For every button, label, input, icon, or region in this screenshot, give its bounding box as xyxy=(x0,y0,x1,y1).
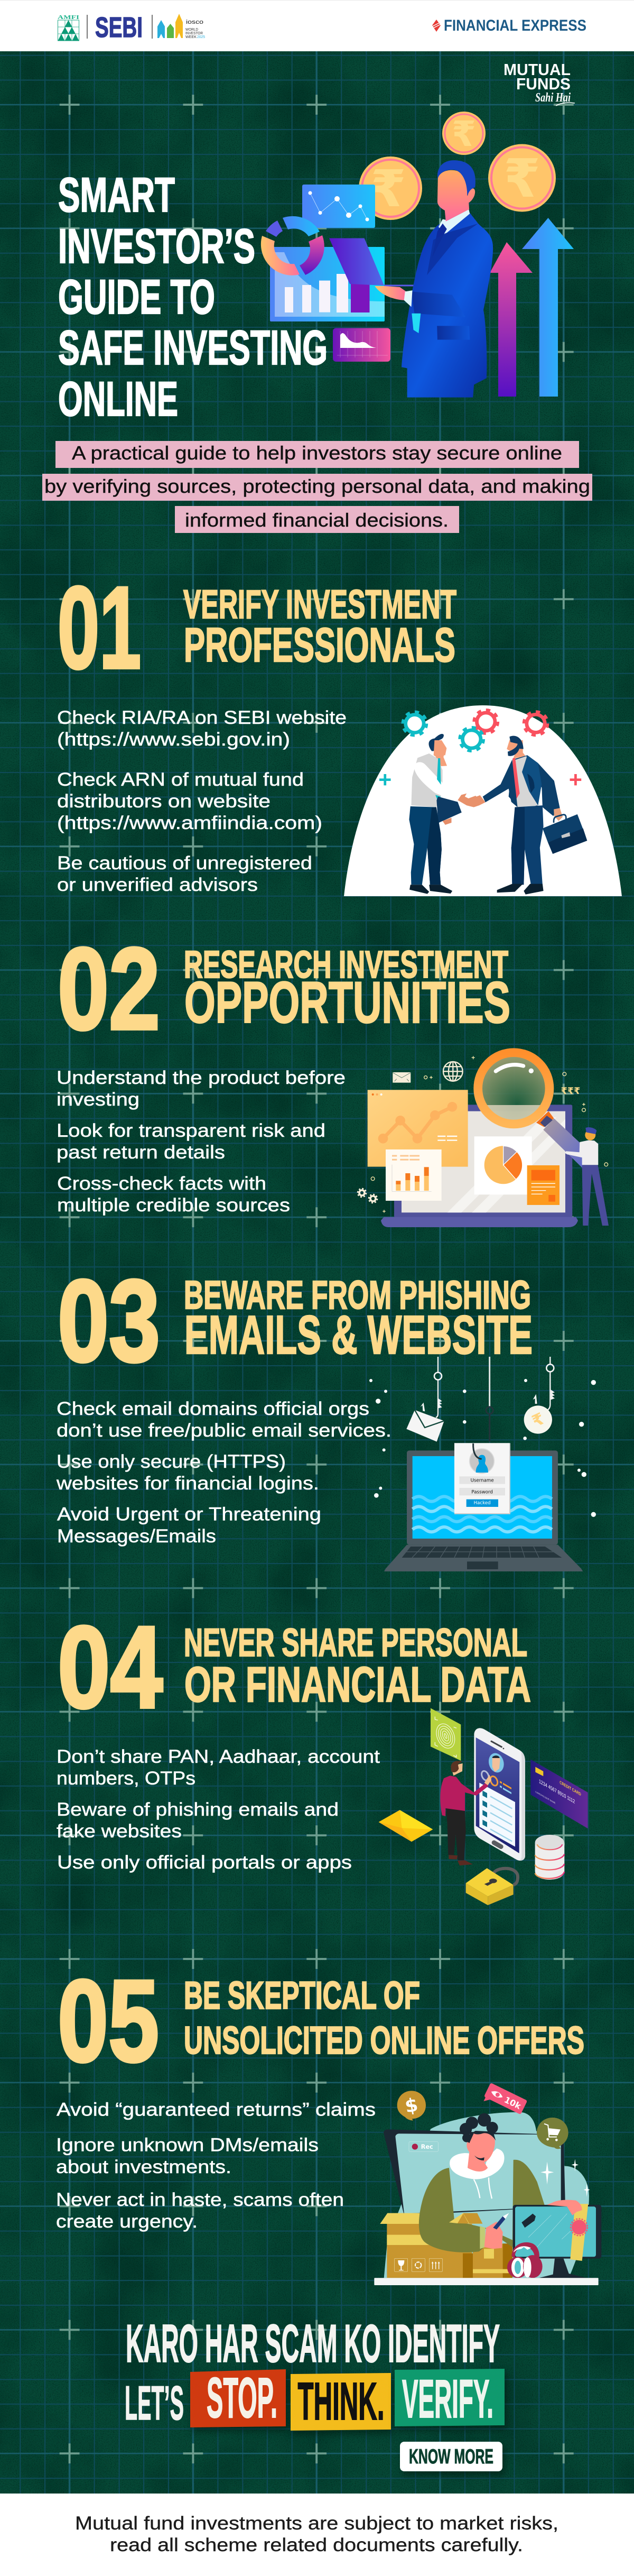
hero illustration: businessman with charts, coins and arrows xyxy=(261,112,574,398)
backdrop blob xyxy=(384,2112,589,2278)
icon: rupee coins: ₹ xyxy=(371,159,406,218)
chart: pie chart card xyxy=(474,1136,532,1194)
section 05 heading xyxy=(184,1974,584,2062)
logo: IOSCO World Investor Week 2025: iosco xyxy=(186,19,203,25)
section 02 text: multiple credible sources xyxy=(57,1195,290,1216)
section 03 illustration: phishing hooks and laptop xyxy=(369,1357,596,1571)
chart: orange line chart panel xyxy=(368,1090,468,1167)
section 04 text: Don’t share PAN, Aadhaar, account xyxy=(57,1746,380,1767)
section 03 text: Check email domains official orgs xyxy=(57,1399,369,1419)
icon: rupee coins xyxy=(359,112,556,220)
chart: dashboard bar chart xyxy=(270,247,385,321)
logo: Mutual Funds Sahi Hai: Sahi Hai xyxy=(535,91,571,105)
icon: rupee coins: ₹ xyxy=(504,148,540,209)
icon: growth arrows xyxy=(490,218,574,397)
button: know more: KNOW MORE xyxy=(409,2445,493,2468)
callout: VERIFY: VERIFY. xyxy=(402,2369,493,2429)
icon: hook with rupee coin xyxy=(524,1357,555,1434)
icon: sparkles xyxy=(540,2159,590,2197)
logo: IOSCO World Investor Week 2025: WEEK xyxy=(185,35,197,39)
figure: right man xyxy=(483,736,563,895)
logo: Mutual Funds Sahi Hai: MUTUAL xyxy=(504,60,571,79)
figure: left man xyxy=(409,734,463,894)
icon: view count bubble: 10k xyxy=(502,2095,523,2111)
subtitle block xyxy=(42,441,592,533)
section 04 text: Beware of phishing emails and xyxy=(57,1799,339,1820)
title: SMART xyxy=(58,168,175,222)
icon: cardboard boxes xyxy=(380,2213,512,2278)
footer disclaimer xyxy=(0,2494,634,2576)
section 05 text xyxy=(56,2099,376,2232)
header bar with partner logos xyxy=(0,0,634,51)
figure: businessman xyxy=(375,160,493,398)
icon: credit card: CREDIT CARD xyxy=(560,1779,581,1797)
icon: hook with rupee coin: ₹ xyxy=(529,1410,547,1431)
icon: credit card xyxy=(530,1760,588,1828)
section 05 text: create urgency. xyxy=(56,2211,198,2232)
section 04 text: Use only official portals or apps xyxy=(57,1852,352,1873)
figure: small person holding magnifier xyxy=(543,1118,609,1226)
chart: mini area chart card xyxy=(333,328,390,362)
figure: person in hoodie xyxy=(419,2113,548,2259)
subtitle block: A practical guide to help investors stay secure online xyxy=(72,442,562,464)
section 02 text: investing xyxy=(57,1089,139,1110)
logo: Financial Express: FINANCIAL EXPRESS xyxy=(444,17,586,34)
small decoration dots xyxy=(369,1379,596,1517)
section 03 text: Use only secure (HTTPS) xyxy=(57,1451,286,1472)
section 01 text: Be cautious of unregistered xyxy=(57,853,312,873)
section 01 heading xyxy=(183,582,456,672)
section 04 text: fake websites xyxy=(57,1821,182,1842)
icon: handshake xyxy=(458,794,486,807)
logo: IOSCO World Investor Week 2025: 2025 xyxy=(197,35,205,39)
section 01 text xyxy=(57,707,347,895)
icon: headphones xyxy=(507,2242,543,2278)
logo: IOSCO World Investor Week 2025 xyxy=(157,14,205,39)
title xyxy=(58,168,328,426)
panel: login card: Username xyxy=(471,1478,494,1484)
section 04 text xyxy=(57,1746,380,1873)
icon: speech bubble dollar xyxy=(397,2091,426,2121)
section 05 text: Ignore unknown DMs/emails xyxy=(56,2135,319,2155)
icon: small gears xyxy=(358,1189,377,1203)
icon: large monitor xyxy=(384,2129,565,2215)
subtitle block: by verifying sources, protecting personal data, and making xyxy=(44,475,590,497)
closing slogan xyxy=(125,2314,505,2431)
callout: THINK xyxy=(291,2372,391,2431)
small decorations xyxy=(371,1056,608,1213)
section 03 text: don’t use free/public email services. xyxy=(57,1420,391,1441)
logo: AMFI xyxy=(58,14,79,41)
icon: credit card: 1234 4567 8910 1112 xyxy=(539,1779,575,1805)
logo: Mutual Funds Sahi Hai xyxy=(504,60,575,106)
logo: Mutual Funds Sahi Hai: FUNDS xyxy=(516,75,571,93)
section 01 text: (https://www.sebi.gov.in) xyxy=(57,729,290,750)
section 02 text: past return details xyxy=(57,1142,225,1163)
section 05 text: Never act in haste, scams often xyxy=(56,2189,344,2210)
icon: hook with envelope xyxy=(406,1357,444,1442)
shelf xyxy=(374,2278,599,2285)
icon: yellow envelope xyxy=(379,1810,433,1842)
section 03 number: 03 xyxy=(58,1256,160,1386)
title: ONLINE xyxy=(58,372,178,426)
icon: database cylinder xyxy=(535,1835,564,1880)
title: SAFE INVESTING xyxy=(58,321,328,375)
icon: globe xyxy=(443,1062,463,1081)
button: know more xyxy=(400,2442,502,2471)
section 04 illustration: phone with identity data xyxy=(379,1708,588,1905)
section 03 text: Messages/Emails xyxy=(57,1526,216,1547)
section 02 heading xyxy=(184,944,510,1035)
icon: credit card: CARDHOLDER NAME xyxy=(535,1790,555,1805)
section 02 text: Look for transparent risk and xyxy=(57,1120,325,1141)
callout: VERIFY xyxy=(395,2369,505,2429)
figure: person touching phone xyxy=(440,1761,491,1865)
icon: padlock xyxy=(466,1868,518,1905)
section 01 heading: PROFESSIONALS xyxy=(184,619,455,672)
icon: briefcase xyxy=(543,814,587,854)
subtitle block: informed financial decisions. xyxy=(185,509,449,531)
section 03 text: Avoid Urgent or Threatening xyxy=(57,1504,321,1525)
icon: gears xyxy=(403,710,547,751)
section 03 text xyxy=(56,1399,391,1547)
icon: shopping cart bubble xyxy=(537,2118,568,2149)
callout: STOP xyxy=(190,2366,286,2430)
section 02 illustration: magnifier over laptop and charts xyxy=(358,1053,609,1227)
callout: THINK: THINK. xyxy=(298,2372,385,2431)
icon: smartphone xyxy=(474,1728,525,1861)
icon: laptop xyxy=(381,1105,578,1227)
footer disclaimer: Mutual fund investments are subject to market risks, xyxy=(75,2513,558,2534)
section 05 text: Avoid “guaranteed returns” claims xyxy=(57,2099,376,2120)
section 01 heading: VERIFY INVESTMENT xyxy=(183,582,456,627)
section 02 text: Understand the product before xyxy=(57,1068,346,1088)
panel: login card: Password xyxy=(471,1490,493,1495)
icon: large monitor: Rec xyxy=(421,2143,433,2150)
closing slogan: LET’S xyxy=(125,2377,184,2430)
footer disclaimer: read all scheme related documents carefully. xyxy=(110,2535,523,2555)
section 01 number: 01 xyxy=(58,563,141,693)
section 01 text: Check ARN of mutual fund xyxy=(57,769,304,790)
icon: fingerprint card xyxy=(431,1708,461,1761)
section 03 heading xyxy=(184,1273,533,1365)
logo: IOSCO World Investor Week 2025: INVESTOR xyxy=(185,32,203,35)
logo: SEBI: SEBI xyxy=(95,12,143,43)
section 04 heading xyxy=(184,1621,531,1712)
icon: centre fishing hook xyxy=(473,1357,493,1459)
section 01 text: Check RIA/RA on SEBI website xyxy=(57,707,347,728)
closing slogan: STOP. xyxy=(207,2366,277,2430)
title: GUIDE TO xyxy=(58,270,215,324)
icon: laptop xyxy=(329,238,431,287)
section 01 text: distributors on website xyxy=(57,791,271,812)
section 02 text xyxy=(57,1068,346,1216)
divider xyxy=(152,15,153,39)
section 01 text: or unverified advisors xyxy=(57,875,258,895)
chart: blue line chart panel xyxy=(302,185,375,228)
icon: rupee symbols: ₹₹₹ xyxy=(561,1086,580,1097)
section 05 text: about investments. xyxy=(56,2157,231,2177)
section 04 number: 04 xyxy=(58,1602,163,1732)
panel: login card: Hacked xyxy=(474,1501,491,1506)
logo: AMFI: AMFI xyxy=(58,14,79,21)
icon: orange document xyxy=(527,1165,560,1205)
title: INVESTOR’S xyxy=(58,219,255,273)
icon: small monitor with ribbon xyxy=(513,2200,601,2278)
icon: laptop xyxy=(384,1450,583,1571)
panel: login card xyxy=(454,1443,510,1514)
section 03 text: websites for financial logins. xyxy=(56,1473,319,1494)
icon: view count bubble xyxy=(482,2083,527,2118)
logo: IOSCO World Investor Week 2025: WORLD xyxy=(185,28,198,32)
section 02 number: 02 xyxy=(58,924,160,1054)
section 02 text: Cross-check facts with xyxy=(57,1173,266,1194)
section 05 number: 05 xyxy=(58,1956,159,2086)
section 05 heading: BE SKEPTICAL OF xyxy=(184,1974,420,2017)
icon: envelope xyxy=(393,1072,411,1083)
icon: magnifying glass xyxy=(478,1053,554,1127)
icon: rupee coins: ₹ xyxy=(452,114,476,154)
section 05 illustration: online seller on screen xyxy=(374,2083,601,2285)
divider xyxy=(87,15,88,39)
icon: speech bubble dollar: $ xyxy=(403,2094,419,2118)
chart: small bar chart card xyxy=(386,1149,442,1201)
section 01 illustration: handshake in white dome xyxy=(344,705,622,896)
chart: donut xyxy=(261,216,324,275)
section 01 text: (https://www.amfiindia.com) xyxy=(57,813,322,833)
section 04 text: numbers, OTPs xyxy=(57,1768,195,1789)
